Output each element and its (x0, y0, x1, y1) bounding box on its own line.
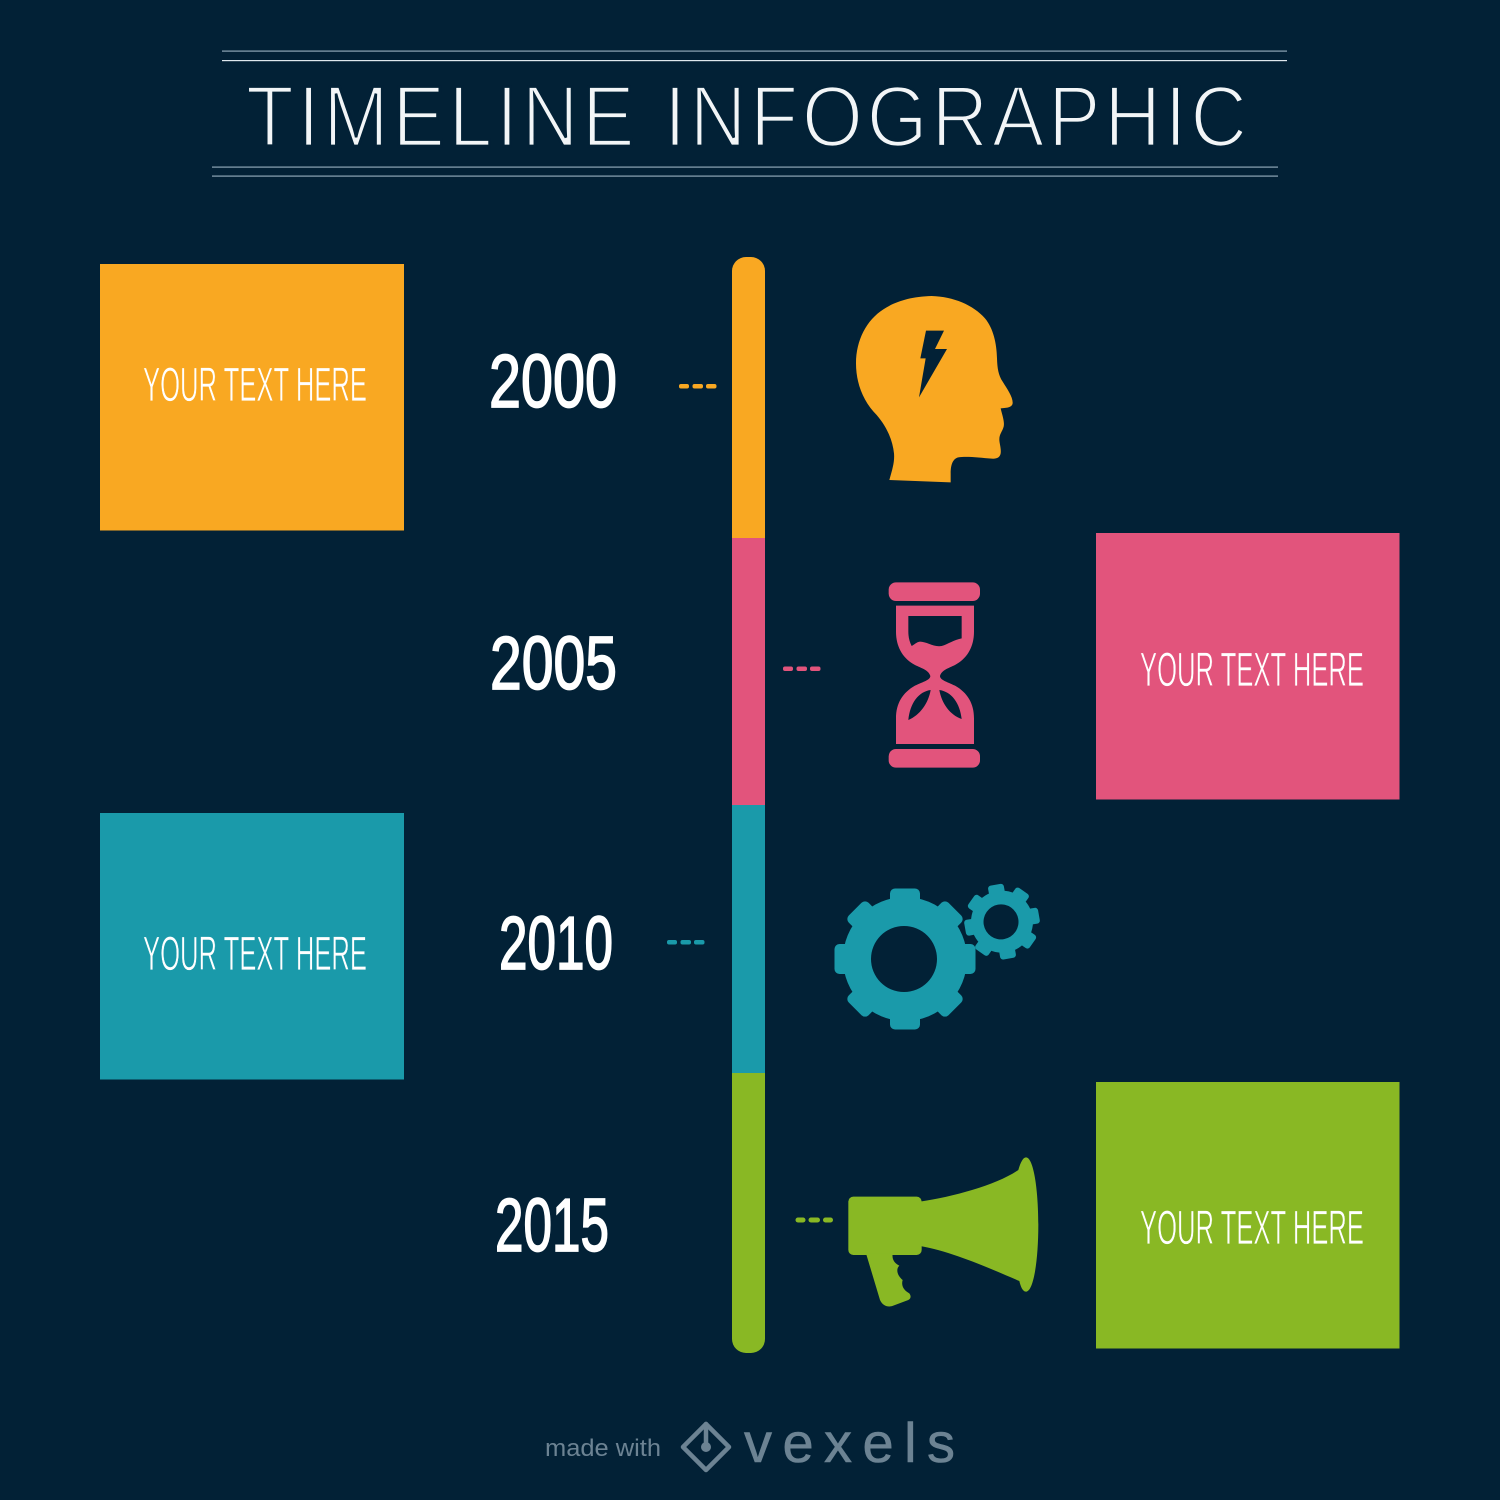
timeline bar (732, 257, 765, 1353)
connector dashes 2005 (783, 666, 820, 671)
vexels wordmark: vexels (744, 1411, 955, 1474)
year 2015: 2015 (495, 1183, 609, 1267)
panel: 2015 text box (1096, 1082, 1400, 1348)
panel: 2000 text box: YOUR TEXT HERE (143, 359, 367, 412)
year 2005: 2005 (490, 621, 617, 705)
small gear (959, 878, 1045, 965)
title: TIMELINE INFOGRAPHIC (246, 70, 1247, 165)
connector dashes 2010 (667, 940, 704, 944)
icon: megaphone (848, 1157, 1038, 1306)
footer watermark (545, 1411, 955, 1474)
year 2010: 2010 (499, 901, 613, 985)
icon: vexels logo (683, 1424, 729, 1470)
icon: head with lightning bolt (856, 296, 1013, 482)
icon: hourglass (889, 582, 980, 768)
panel: 2010 text box: YOUR TEXT HERE (143, 928, 367, 981)
made with label: made with (545, 1435, 661, 1462)
year 2000: 2000 (489, 339, 617, 423)
panel: 2005 text box (1096, 533, 1400, 800)
large gear (834, 888, 976, 1030)
connector dashes 2015 (796, 1218, 833, 1222)
panel: 2010 text box (100, 813, 404, 1080)
panel: 2000 text box (100, 264, 404, 530)
icon: gears (834, 878, 1045, 1030)
connector dashes 2000 (679, 384, 716, 388)
